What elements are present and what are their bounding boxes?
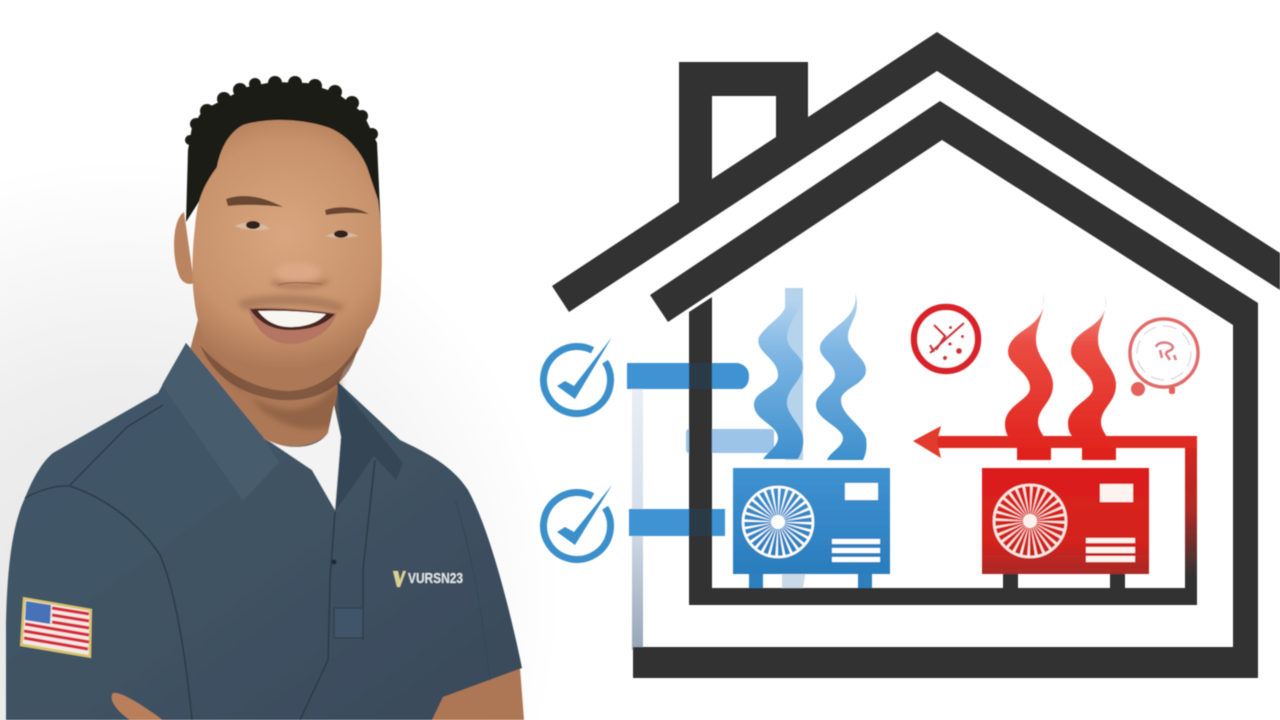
blue refrigerant line bottom [629,509,725,536]
fan spokes [1011,502,1049,540]
flag stripes [24,608,89,649]
gauge inner ring [1137,326,1191,380]
unit body [982,468,1149,574]
left eye [235,221,270,230]
arrow shaft [935,436,1197,448]
mouth opening [250,309,335,330]
left iris [246,221,260,229]
display panel [845,483,878,500]
fan hub [1023,514,1037,528]
pale vertical pipe outside wall [632,389,643,650]
inner wall overlap on pale bar [689,429,712,453]
placket tab [334,608,363,638]
logo wordmark: VURSN23 [408,570,463,587]
particles [949,326,964,338]
flag canton [25,601,51,624]
shirt left collar [162,343,279,501]
red wave left [1005,293,1053,460]
pale pipe below blue unit [782,570,806,588]
logo mark [393,571,406,587]
gauge dot small [1169,387,1175,394]
right forearm [430,668,524,720]
gauge ring [1130,319,1198,387]
hair curls [190,118,202,130]
house and heat pump diagram [531,32,1280,678]
polo shirt [6,343,522,720]
nostril shading [272,281,328,286]
blue wave left [754,300,803,459]
check mark [557,337,612,399]
smile lips [248,307,337,344]
badge ring [531,334,623,426]
unit legs [749,574,872,588]
blue wave right [816,292,867,460]
light blue connector bar [686,429,774,453]
american flag patch [20,597,92,658]
pale vertical pipe behind blue waves [785,288,803,460]
nose highlight [276,263,320,281]
right eyebrow [325,207,369,215]
vent slats [832,539,880,562]
flag field [23,600,89,655]
vent slats [1086,538,1135,562]
blue line overlap bottom [689,509,712,536]
under chin shadow [205,350,342,429]
chimney [679,62,808,215]
house outer wall and floor [633,303,1258,678]
crossed particles [930,323,964,353]
icon: no allergens [914,307,978,371]
display panel [1100,484,1133,502]
blue line overlap on wall [689,363,712,389]
red wave right [1068,295,1116,460]
gauge glyph [1156,342,1176,360]
face [192,120,382,397]
red pipe and arrow [913,426,1197,605]
fan ring [994,485,1066,557]
check mark [557,485,612,545]
unit legs [1003,574,1125,588]
blue outdoor unit [733,468,890,588]
fan spokes [759,503,797,541]
neck [190,300,372,447]
inner room walls [689,297,1185,605]
teeth [258,311,326,327]
badge ring [531,480,623,572]
hair mass [186,82,381,230]
left eyebrow [226,196,283,207]
left eye white [235,223,270,230]
checkmark badge bottom [531,480,623,572]
checkmark badge top [531,334,623,426]
crossed arm hand [112,693,162,720]
shirt seams and placket [25,405,490,720]
right eye white [326,232,358,238]
shirt right collar [336,381,403,510]
arrow head [913,426,941,458]
shirt logo [393,570,463,587]
pipe down right side [1185,436,1197,605]
prohibition ring [914,307,978,371]
red outdoor unit [982,468,1149,588]
chin beard shadow [200,345,358,400]
fan ring [743,487,813,557]
flag border [20,597,92,658]
inner roof [650,101,1258,325]
nose base line [278,283,322,285]
hair [185,76,381,230]
mustache shading [237,295,345,312]
shirt button [332,560,336,564]
right eye [326,230,358,238]
gauge dot large [1131,382,1145,396]
background glow behind technician [0,160,560,720]
technician portrait [6,76,524,720]
icon: pressure gauge [1130,319,1198,396]
left ear [174,212,194,284]
unit body [733,468,890,574]
fan hub [771,515,785,529]
blue refrigerant line top [627,363,749,389]
particle dots [943,342,962,360]
right iris [334,230,348,238]
outer roof [552,32,1280,312]
white undershirt [263,405,341,510]
